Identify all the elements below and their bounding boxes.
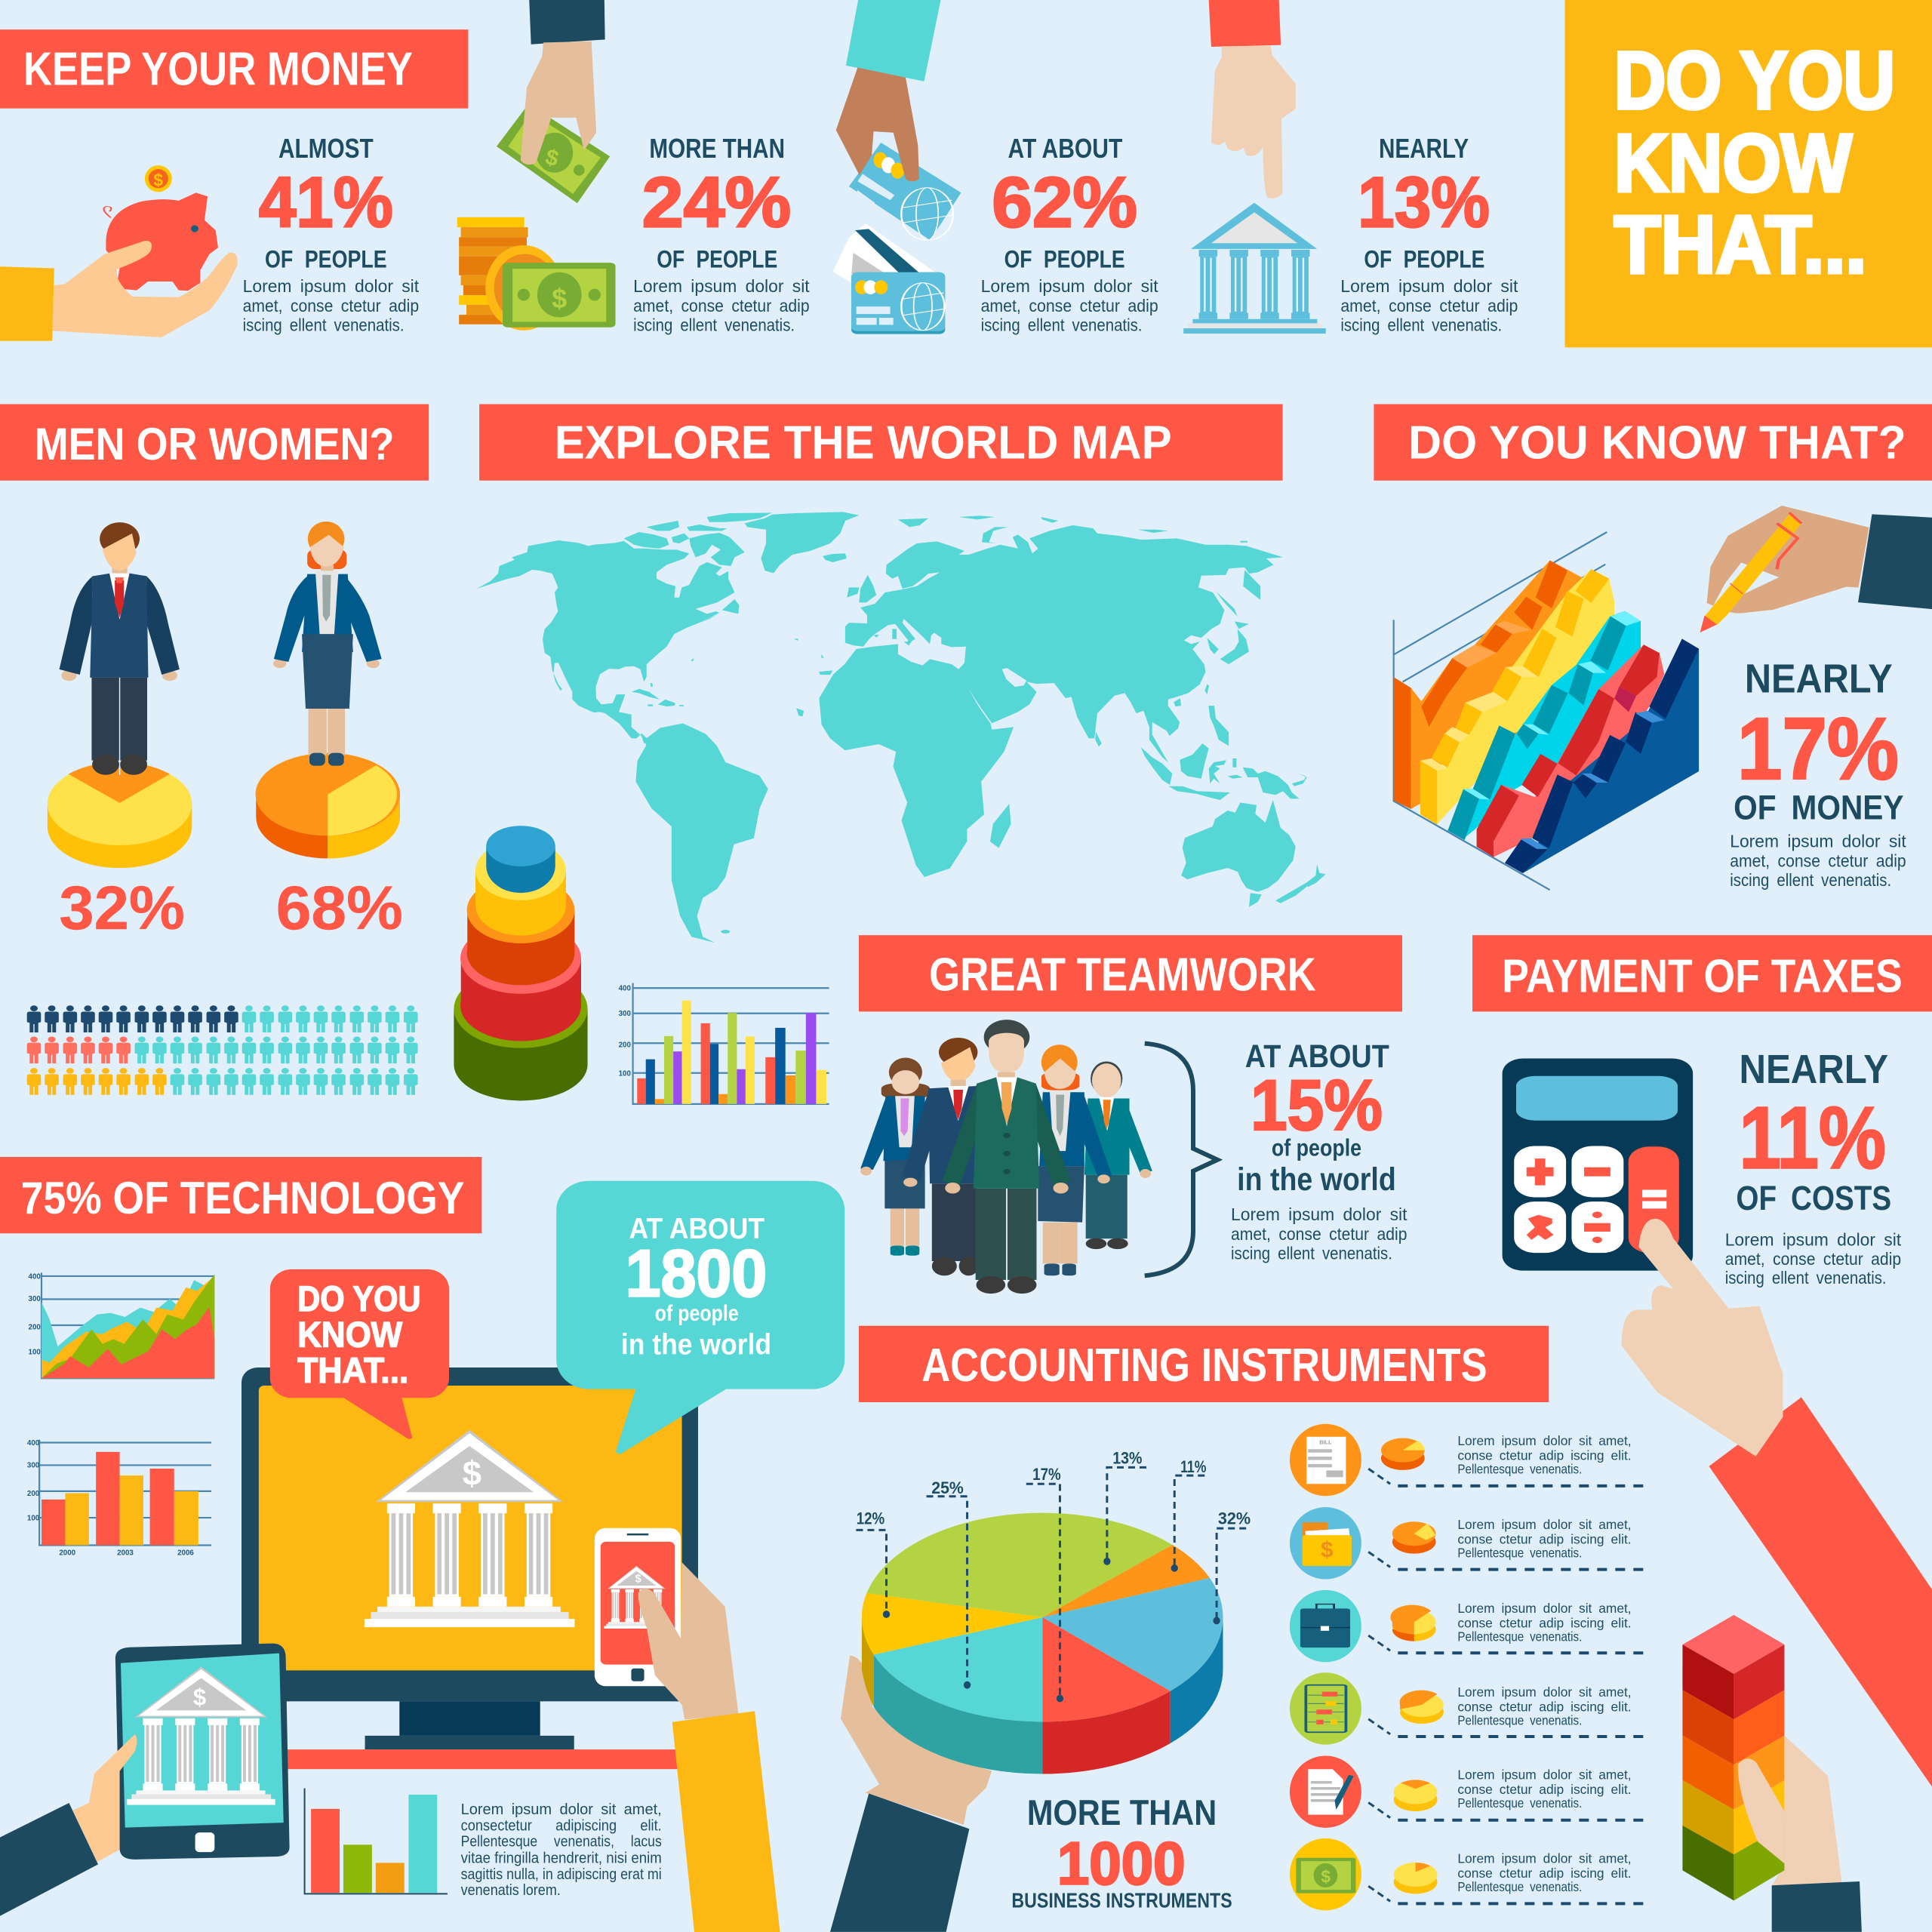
text: technology paragraph: consectetur adipiscing elit. bbox=[461, 1817, 662, 1834]
dollar signs on top icons: $ bbox=[543, 144, 561, 171]
stat: nearly 13%: OF PEOPLE bbox=[1364, 245, 1484, 272]
stat: at about 62%: Lorem ipsum dolor sit bbox=[981, 276, 1158, 296]
icon: teal bank bbox=[1183, 203, 1326, 334]
africa bbox=[819, 644, 1014, 877]
percent labels: men and women bbox=[59, 874, 403, 943]
stat: at about 15%: iscing ellent venenatis. bbox=[1231, 1244, 1392, 1263]
heading: 75% of technology bbox=[0, 1157, 481, 1233]
pie percent labels: 32% bbox=[1218, 1509, 1251, 1528]
stat: more than 24% bbox=[633, 133, 810, 334]
navy sleeve right bbox=[1772, 1881, 1862, 1932]
stat: at about 15%: 15% bbox=[1251, 1066, 1383, 1146]
chart: column chart bbox=[633, 983, 829, 1104]
stat: nearly 13%: 13% bbox=[1358, 162, 1490, 242]
men women, pies, stack and column chart bbox=[27, 521, 829, 1104]
stat: almost 41%: Lorem ipsum dolor sit bbox=[243, 276, 420, 296]
north america mainland bbox=[477, 540, 734, 743]
stat: more than 1000: BUSINESS INSTRUMENTS bbox=[1011, 1888, 1232, 1912]
instrument row 2: folder bbox=[1290, 1507, 1645, 1580]
heading: do you know that: DO YOU KNOW THAT? bbox=[1408, 417, 1906, 469]
pointing hand and bank bbox=[1183, 0, 1326, 334]
row text 4: Pellentesque venenatis. bbox=[1457, 1713, 1582, 1728]
chart: grouped bars bbox=[39, 1440, 211, 1545]
text: at about 1800 bubble: 1800 bbox=[626, 1236, 767, 1311]
stat: at about 15%: of people bbox=[1272, 1134, 1361, 1161]
bank dollar signs: $ bbox=[193, 1684, 206, 1711]
pie leader lines bbox=[856, 1467, 1246, 1702]
stat: at about 15%: Lorem ipsum dolor sit bbox=[1231, 1204, 1407, 1224]
row text 4: conse ctetur adip iscing elit. bbox=[1457, 1700, 1632, 1715]
instrument row 4: abacus bbox=[1290, 1672, 1645, 1745]
heading: accounting instruments bbox=[859, 1326, 1549, 1402]
tasmania bbox=[1249, 893, 1262, 907]
stat: almost 41%: ALMOST bbox=[278, 133, 374, 164]
text: technology paragraph: Pellentesque venenatis, lacus bbox=[461, 1834, 662, 1850]
row text 6: Pellentesque venenatis. bbox=[1457, 1879, 1582, 1894]
text: technology paragraph: vitae fringilla hendrerit, nisi enim bbox=[461, 1850, 662, 1867]
stat: nearly 17% of money: Lorem ipsum dolor sit bbox=[1730, 831, 1906, 851]
indonesia bbox=[1141, 743, 1243, 800]
icon: hand holding pig bbox=[52, 241, 238, 337]
text: do you know that bubble: KNOW bbox=[297, 1315, 402, 1355]
pie percent labels: 11% bbox=[1180, 1457, 1207, 1476]
icon: green banknote bbox=[503, 263, 616, 328]
newfoundland and nova scotia bbox=[700, 599, 739, 623]
australia bbox=[1181, 800, 1296, 892]
stat: nearly 13%: Lorem ipsum dolor sit bbox=[1340, 276, 1518, 296]
greenland bbox=[745, 512, 859, 573]
figure: man second bbox=[902, 1038, 978, 1275]
chart: small bars bbox=[305, 1789, 448, 1894]
instrument descriptions bbox=[1457, 1433, 1632, 1894]
row text 5: conse ctetur adip iscing elit. bbox=[1457, 1782, 1632, 1797]
stat: nearly 11% of costs: iscing ellent venenatis. bbox=[1725, 1268, 1887, 1287]
chart tick labels, technology: 2006 bbox=[177, 1549, 194, 1557]
desk bar bbox=[286, 1749, 679, 1769]
bank dollar signs: $ bbox=[635, 1573, 641, 1585]
row text 3: Lorem ipsum dolor sit amet, bbox=[1457, 1601, 1632, 1616]
dollar signs on top icons: $ bbox=[552, 283, 567, 314]
hand holding tablet bbox=[72, 1734, 137, 1862]
heading: men or women: MEN OR WOMEN? bbox=[35, 418, 394, 469]
icon: coin bbox=[145, 165, 172, 192]
stat: nearly 17% of money: NEARLY bbox=[1745, 657, 1893, 702]
team and calculator bbox=[860, 1020, 1693, 1294]
series yellow bbox=[1420, 569, 1614, 825]
speech bubble teal bbox=[556, 1181, 844, 1454]
chart tick labels, technology bbox=[27, 1273, 194, 1557]
bank dollar signs: $ bbox=[463, 1454, 481, 1492]
stat: at about 62%: AT ABOUT bbox=[1008, 133, 1122, 164]
panel: do you know that yellow box: KNOW bbox=[1614, 117, 1852, 208]
heading: keep your money bbox=[0, 29, 468, 109]
hand behind column bbox=[1772, 1736, 1842, 1885]
text: at about 1800 bubble: of people bbox=[655, 1301, 739, 1326]
figure: man right bbox=[1084, 1061, 1152, 1249]
red sleeve large bbox=[1709, 1397, 1932, 1786]
eurasia bbox=[845, 525, 1283, 762]
navy sleeve bottom bbox=[830, 1793, 969, 1932]
hand holding pie bbox=[841, 1656, 992, 1825]
series red bbox=[1477, 645, 1664, 857]
stat: almost 41%: OF PEOPLE bbox=[265, 245, 387, 272]
yellow sleeve bbox=[672, 1711, 780, 1932]
column chart axis labels: 400 bbox=[619, 985, 631, 993]
stat: nearly 17% of money: OF MONEY bbox=[1734, 789, 1903, 827]
stat: nearly 17% of money: 17% bbox=[1737, 700, 1899, 798]
bank dollar signs bbox=[193, 1454, 641, 1711]
row text 1: Lorem ipsum dolor sit amet, bbox=[1457, 1433, 1632, 1448]
figure: woman right bbox=[1038, 1044, 1112, 1275]
row text 2: conse ctetur adip iscing elit. bbox=[1457, 1532, 1632, 1547]
icon array: people bbox=[27, 1005, 418, 1095]
stat: nearly 13%: iscing ellent venenatis. bbox=[1340, 315, 1502, 334]
figure: woman bbox=[273, 521, 382, 766]
stat: nearly 11% of costs: 11% bbox=[1739, 1089, 1886, 1187]
phone bbox=[595, 1528, 681, 1686]
stat: almost 41%: 41% bbox=[259, 162, 393, 242]
stat: at about 62%: amet, conse ctetur adip bbox=[981, 296, 1158, 315]
icon: white back card bbox=[833, 223, 937, 283]
icon: front credit card bbox=[851, 272, 945, 334]
stat: nearly 13%: amet, conse ctetur adip bbox=[1340, 296, 1518, 315]
new guinea bbox=[1243, 768, 1307, 798]
stat: nearly 11% of costs bbox=[1725, 1047, 1902, 1287]
chart tick labels, technology: 300 bbox=[29, 1295, 41, 1303]
pie percent labels: 17% bbox=[1032, 1465, 1061, 1484]
row text 5: Lorem ipsum dolor sit amet, bbox=[1457, 1767, 1632, 1783]
row text 3 bbox=[1457, 1601, 1632, 1644]
column chart axis labels bbox=[619, 985, 631, 1078]
monitor bbox=[242, 1367, 698, 1749]
stat: nearly 11% of costs: OF COSTS bbox=[1736, 1179, 1891, 1217]
chart tick labels, technology: 200 bbox=[29, 1324, 41, 1332]
heading: explore the world map bbox=[479, 405, 1283, 481]
heading: men or women bbox=[0, 405, 429, 481]
pie percent labels: 12% bbox=[857, 1509, 885, 1528]
stat: more than 24%: OF PEOPLE bbox=[657, 245, 777, 272]
arctic islands bbox=[624, 512, 772, 566]
map: south america bbox=[635, 724, 768, 943]
icon: navy sleeve bbox=[1858, 514, 1932, 609]
text: at about 1800 bubble: in the world bbox=[621, 1328, 771, 1361]
icon: pointing hand bbox=[1211, 46, 1296, 198]
icon: piggy bank bbox=[106, 192, 218, 291]
stat: more than 24%: amet, conse ctetur adip bbox=[633, 296, 810, 315]
navy sleeve left bbox=[0, 1803, 98, 1916]
iceland bbox=[823, 553, 847, 562]
stat: more than 24%: 24% bbox=[642, 162, 791, 242]
icon: falling bill bbox=[497, 104, 610, 203]
percent labels: men and women: 68% bbox=[276, 874, 403, 943]
madagascar bbox=[990, 804, 1011, 848]
stat: nearly 17% of money: iscing ellent venenatis. bbox=[1730, 870, 1891, 890]
column chart axis labels: 100 bbox=[619, 1069, 631, 1078]
chart tick labels, technology: 200 bbox=[27, 1490, 40, 1498]
pie percent labels: 25% bbox=[931, 1478, 964, 1497]
chart: isometric column bbox=[1682, 1615, 1784, 1900]
column chart axis labels: 300 bbox=[619, 1010, 631, 1018]
stat: more than 1000 bbox=[1011, 1793, 1232, 1912]
persian gulf bbox=[1002, 668, 1026, 687]
speech bubble red bbox=[270, 1269, 449, 1439]
stat: almost 41% bbox=[243, 133, 420, 334]
row text 5: Pellentesque venenatis. bbox=[1457, 1795, 1582, 1810]
series cyan bbox=[1447, 611, 1641, 840]
stat: more than 1000: MORE THAN bbox=[1027, 1793, 1217, 1833]
stat: at about 62% bbox=[981, 133, 1158, 334]
map: eurasia and africa bbox=[819, 515, 1283, 877]
stat: more than 24%: Lorem ipsum dolor sit bbox=[633, 276, 810, 296]
row text 4: Lorem ipsum dolor sit amet, bbox=[1457, 1684, 1632, 1700]
chart axes bbox=[1394, 532, 1607, 890]
icon: credit card with globe bbox=[849, 143, 961, 240]
world map bbox=[477, 512, 1326, 943]
figure: woman left bbox=[860, 1057, 930, 1256]
stat: at about 15% bbox=[1231, 1038, 1407, 1263]
chart tick labels, technology: 400 bbox=[27, 1439, 40, 1447]
chart tick labels, technology: 2000 bbox=[59, 1549, 76, 1557]
text: technology paragraph: venenatis lorem. bbox=[461, 1882, 561, 1899]
stat: more than 1000: 1000 bbox=[1057, 1829, 1186, 1897]
row text 2: Pellentesque venenatis. bbox=[1457, 1546, 1582, 1561]
stat: nearly 17% of money: amet, conse ctetur adip bbox=[1730, 851, 1906, 871]
row text 1 bbox=[1457, 1433, 1632, 1477]
dollar signs on top icons: $ bbox=[1250, 219, 1262, 242]
icon: hand with bill bbox=[521, 42, 596, 165]
icon details: small text on instruments bbox=[1319, 1438, 1334, 1887]
stat: at about 15%: amet, conse ctetur adip bbox=[1231, 1224, 1407, 1244]
mediterranean islands bbox=[873, 629, 912, 645]
map: southeast asia and oceania bbox=[1141, 743, 1326, 907]
stat: nearly 13% bbox=[1340, 133, 1518, 334]
britain and ireland bbox=[847, 575, 876, 602]
hand pressing calculator bbox=[1622, 1219, 1783, 1457]
map: north america and greenland bbox=[477, 512, 859, 743]
icon details: small text on instruments: $ bbox=[1321, 1867, 1331, 1887]
chart: large 3d pie bbox=[862, 1513, 1223, 1774]
arctic eurasian islands bbox=[898, 515, 1247, 543]
panel: do you know that yellow box: DO YOU bbox=[1614, 35, 1895, 126]
icon: sleeve navy bbox=[529, 0, 605, 45]
icon: monitor bank bbox=[365, 1430, 574, 1627]
pie: women 68% bbox=[256, 753, 400, 859]
kamchatka and sakhalin bbox=[1216, 570, 1260, 617]
heading: do you know that bbox=[1374, 405, 1932, 481]
series blue bbox=[1505, 638, 1699, 873]
stat: nearly 17% of money bbox=[1730, 657, 1906, 890]
row text 6 bbox=[1457, 1851, 1632, 1894]
stat: nearly 11% of costs: Lorem ipsum dolor sit bbox=[1725, 1230, 1902, 1250]
stat: at about 62%: 62% bbox=[992, 162, 1137, 242]
technology section bbox=[0, 1181, 844, 1932]
stat: almost 41%: amet, conse ctetur adip bbox=[243, 296, 419, 315]
stat: at about 62%: OF PEOPLE bbox=[1004, 245, 1125, 272]
icon details: small text on instruments: $ bbox=[1321, 1538, 1334, 1563]
text: technology paragraph: sagittis nulla, in adipiscing erat mi bbox=[461, 1866, 662, 1883]
instrument row 3: briefcase bbox=[1290, 1590, 1645, 1662]
pie percent labels: 13% bbox=[1112, 1449, 1143, 1468]
south asian islands bbox=[1095, 685, 1229, 746]
text: technology paragraph: Lorem ipsum dolor sit amet, bbox=[461, 1801, 662, 1818]
text: technology paragraph bbox=[461, 1801, 662, 1899]
percent labels: men and women: 32% bbox=[59, 874, 185, 943]
brace bbox=[1145, 1044, 1217, 1275]
accounting section bbox=[830, 1424, 1862, 1932]
dollar signs on top icons bbox=[153, 144, 1262, 314]
new zealand bbox=[1275, 864, 1326, 903]
stat: more than 24%: MORE THAN bbox=[649, 133, 785, 164]
instrument row 5: document bbox=[1290, 1755, 1645, 1828]
stat: at about 62%: iscing ellent venenatis. bbox=[981, 315, 1142, 334]
chart tick labels, technology: 100 bbox=[27, 1515, 40, 1523]
chart tick labels, technology: 400 bbox=[29, 1273, 41, 1281]
row text 1: Pellentesque venenatis. bbox=[1457, 1462, 1582, 1477]
row text 6: Lorem ipsum dolor sit amet, bbox=[1457, 1851, 1632, 1866]
stat: nearly 11% of costs: amet, conse ctetur adip bbox=[1725, 1249, 1901, 1269]
series orange bbox=[1394, 560, 1583, 809]
hand on phone bbox=[638, 1562, 739, 1719]
heading: great teamwork: GREAT TEAMWORK bbox=[929, 949, 1316, 1001]
chart tick labels, technology: 100 bbox=[29, 1348, 41, 1356]
figure: man bbox=[60, 522, 180, 775]
text: do you know that bubble: THAT... bbox=[297, 1351, 408, 1391]
dollar signs on top icons: $ bbox=[153, 171, 163, 190]
text: do you know that bubble: DO YOU bbox=[297, 1279, 421, 1319]
figure: center man bbox=[943, 1020, 1070, 1294]
row text 4 bbox=[1457, 1684, 1632, 1728]
icon: yellow pen bbox=[1700, 512, 1801, 632]
chart: area chart bbox=[42, 1272, 214, 1378]
instrument row 6: banknote bbox=[1290, 1838, 1645, 1910]
icon: brown hand bbox=[836, 68, 919, 181]
row text 1: conse ctetur adip iscing elit. bbox=[1457, 1448, 1632, 1463]
tablet bbox=[115, 1644, 290, 1860]
column chart axis labels: 200 bbox=[619, 1041, 631, 1050]
heading: accounting instruments: ACCOUNTING INSTRUMENTS bbox=[921, 1340, 1487, 1392]
heading: great teamwork bbox=[859, 935, 1402, 1011]
row text 3: Pellentesque venenatis. bbox=[1457, 1629, 1582, 1644]
3d area chart with pen bbox=[1394, 506, 1932, 890]
chart tick labels, technology: 300 bbox=[27, 1461, 40, 1469]
icon: red sleeve bbox=[1209, 0, 1281, 47]
row text 5 bbox=[1457, 1767, 1632, 1810]
heading: 75% of technology: 75% OF TECHNOLOGY bbox=[21, 1172, 465, 1223]
heading: keep your money: KEEP YOUR MONEY bbox=[23, 44, 413, 96]
heading: explore the world map: EXPLORE THE WORLD MAP bbox=[555, 417, 1172, 469]
icon: sleeve teal bbox=[846, 0, 941, 82]
heading: payment of taxes bbox=[1472, 935, 1932, 1011]
text: at about 1800 bubble bbox=[621, 1213, 771, 1361]
falkland islands bbox=[721, 930, 730, 934]
icon details: small text on instruments: BILL bbox=[1319, 1438, 1332, 1445]
stat: almost 41%: iscing ellent venenatis. bbox=[243, 315, 405, 334]
instrument row 1: bill bbox=[1290, 1424, 1645, 1496]
icon: calculator bbox=[1503, 1058, 1693, 1271]
stat: nearly 13%: NEARLY bbox=[1379, 133, 1469, 164]
pie percent labels bbox=[857, 1449, 1251, 1528]
icon: sleeve left bbox=[0, 266, 54, 341]
row text 3: conse ctetur adip iscing elit. bbox=[1457, 1616, 1632, 1631]
stat: nearly 11% of costs: NEARLY bbox=[1739, 1047, 1888, 1092]
stat: at about 15%: in the world bbox=[1237, 1161, 1396, 1197]
chart tick labels, technology: 2003 bbox=[117, 1549, 134, 1557]
stat: at about 15%: AT ABOUT bbox=[1245, 1038, 1389, 1074]
top illustrations left bbox=[0, 0, 961, 341]
stat: more than 24%: iscing ellent venenatis. bbox=[633, 315, 795, 334]
icon: hand writing bbox=[1707, 506, 1869, 614]
pie: men 32% bbox=[48, 762, 192, 868]
icon: pig eye bbox=[191, 225, 198, 232]
row text 6: conse ctetur adip iscing elit. bbox=[1457, 1866, 1632, 1881]
caribbean and atlantic islands bbox=[632, 638, 832, 716]
row text 2 bbox=[1457, 1517, 1632, 1561]
text: at about 1800 bubble: AT ABOUT bbox=[629, 1213, 764, 1245]
text: do you know that bubble bbox=[297, 1279, 421, 1391]
row text 2: Lorem ipsum dolor sit amet, bbox=[1457, 1517, 1632, 1532]
finger on column bbox=[1738, 1758, 1784, 1863]
icon: pig tail bbox=[103, 207, 111, 217]
panel: do you know that yellow box: THAT... bbox=[1614, 198, 1866, 290]
icon: coin stack bbox=[457, 217, 561, 331]
panel: do you know that yellow box bbox=[1564, 0, 1932, 347]
japan and korea bbox=[1207, 621, 1249, 664]
chart: stacked cylinders bbox=[454, 826, 588, 1100]
